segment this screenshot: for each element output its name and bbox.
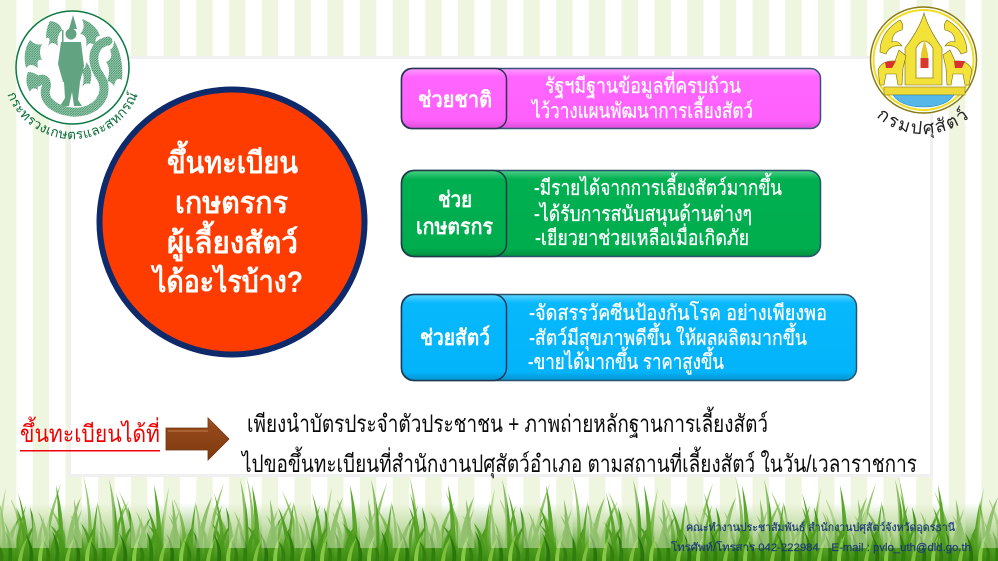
icon: horse <box>943 50 972 85</box>
text: -สัตว์มีสุขภาพดีขึ้น ให้ผลผลิตมากขึ้น <box>529 323 807 351</box>
text <box>530 71 753 123</box>
text <box>534 173 782 250</box>
panel: help animals <box>402 294 856 380</box>
circle heading: ผู้เลี้ยงสัตว์ <box>167 220 298 262</box>
text: -เยียวยาช่วยเหลือเมื่อเกิดภัย <box>535 223 749 250</box>
panel: help the nation <box>402 68 820 128</box>
circle heading <box>100 90 364 354</box>
label: ช่วย <box>438 187 472 212</box>
where to register label: ขึ้นทะเบียนได้ที่ <box>20 416 160 448</box>
label <box>402 68 506 128</box>
white content panel <box>70 58 932 476</box>
icon: water <box>893 95 954 107</box>
department name: กรมปศุสัตว์ <box>877 105 968 138</box>
ministry name: กระทรวงเกษตรและสหกรณ์ <box>8 90 138 140</box>
label: เกษตรกร <box>416 214 493 239</box>
text <box>528 301 827 375</box>
icon: cow <box>878 50 906 85</box>
icon: shrine arch <box>905 13 942 85</box>
underline of where to register <box>20 450 160 452</box>
logo: Department of Livestock Development <box>870 6 978 138</box>
arrow <box>166 418 229 460</box>
text: -ได้รับการสนับสนุนด้านต่างๆ <box>534 202 752 227</box>
label <box>402 294 506 380</box>
text: -จัดสรรวัคซีนป้องกันโรค อย่างเพียงพอ <box>529 301 827 325</box>
text: -มีรายได้จากการเลี้ยงสัตว์มากขึ้น <box>534 173 782 200</box>
registration instructions: เพียงนำบัตรประจำตัวประชาชน + ภาพถ่ายหลักฐานการเลี้ยงสัตว์ <box>247 406 768 438</box>
icon: flame ornaments <box>25 19 122 92</box>
icon: pedestal <box>884 87 965 95</box>
icon: shrine niche <box>916 41 933 78</box>
registration instructions <box>240 406 917 479</box>
circle heading: เกษตรกร <box>175 187 288 220</box>
label: ช่วยสัตว์ <box>420 325 490 350</box>
circle heading: ขึ้นทะเบียน <box>167 140 298 180</box>
panel: help farmers <box>402 170 820 256</box>
text: รัฐฯมีฐานข้อมูลที่ครบถ้วน <box>545 71 741 99</box>
label <box>402 170 506 256</box>
grass strip <box>0 471 998 561</box>
logo: Ministry of Agriculture and Cooperatives <box>8 10 138 140</box>
footer contact: โทรศัพท์/โทรสาร 042-222984 E-mail : pvlo_uth@dld.go.th <box>671 540 971 554</box>
label: ช่วยชาติ <box>418 87 492 112</box>
icon: ornaments <box>880 20 967 54</box>
text: -ขายได้มากขึ้น ราคาสูงขึ้น <box>528 347 724 375</box>
icon: naga serpent <box>38 41 108 112</box>
footer contact: คณะทำงานประชาสัมพันธ์ สำนักงานปศุสัตว์จังหวัดอุดรธานี <box>686 521 955 534</box>
icon: deity figure <box>58 15 84 106</box>
footer contact <box>671 521 971 554</box>
circle heading: ได้อะไรบ้าง? <box>150 264 303 299</box>
text: ไว้วางแผนพัฒนาการเลี้ยงสัตว์ <box>530 96 753 123</box>
